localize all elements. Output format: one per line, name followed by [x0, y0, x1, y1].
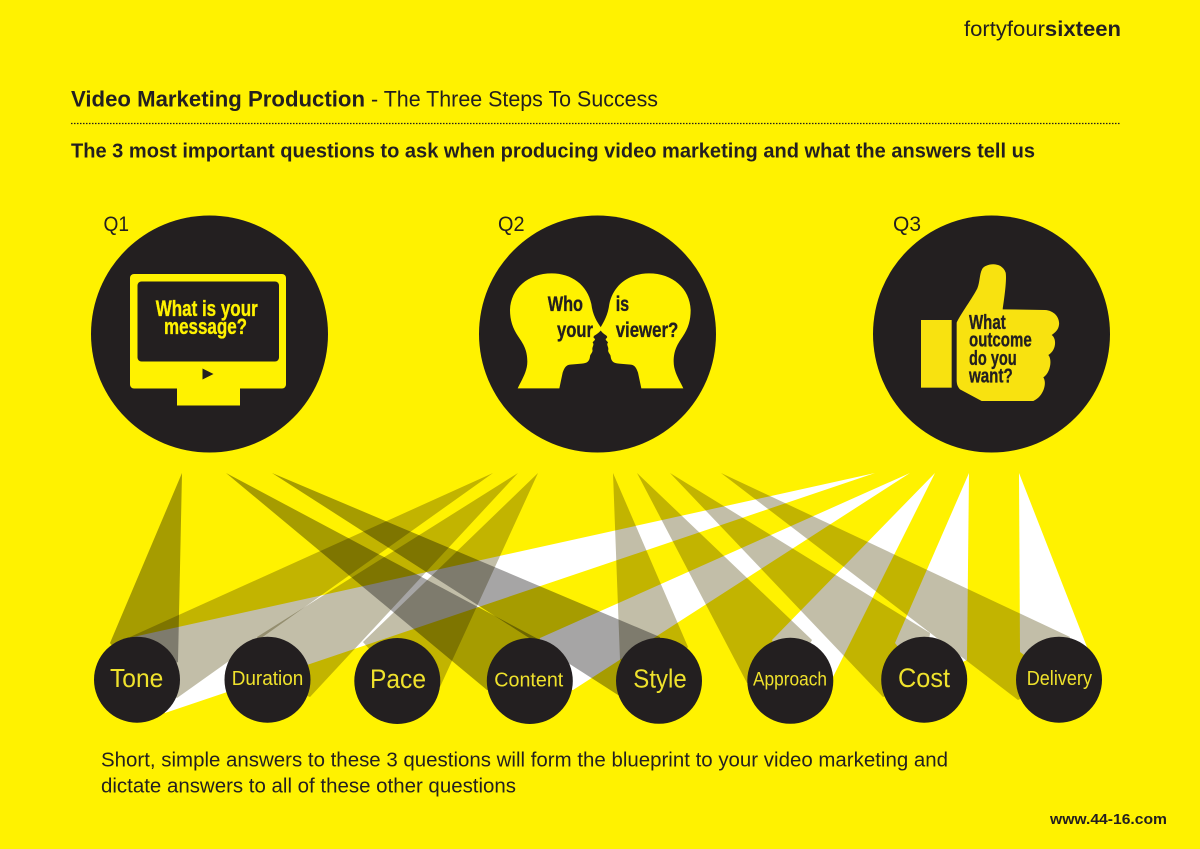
Q3 question text: want? [968, 366, 1013, 388]
website url: www.44-16.com [1049, 811, 1167, 828]
answer: Delivery: Delivery [1027, 667, 1093, 690]
Q2 question text: Who [548, 293, 583, 316]
closing text block: dictate answers to all of these other questions [101, 774, 516, 798]
brand logo: fortyfoursixteen [964, 18, 1121, 41]
Q2 circle [479, 216, 716, 452]
Q1 question text: message? [164, 314, 247, 339]
panel: Q1 message [91, 213, 328, 452]
subtitle: The 3 most important questions to ask when producing video marketing and what the answers tell us [71, 140, 1035, 162]
beams: answers linked to the three questions [110, 473, 1087, 713]
answer: Approach [747, 638, 833, 724]
answer: Delivery [1016, 637, 1102, 723]
Q3 label: Q3 [893, 213, 921, 236]
answer: Duration: Duration [232, 668, 303, 690]
answer: Approach: Approach [753, 669, 827, 691]
Q2 question text: your [557, 319, 593, 342]
panel: Q3 outcome [873, 213, 1110, 452]
answer: Pace: Pace [370, 664, 426, 694]
icon: two facing heads [510, 273, 691, 388]
answer: Cost [881, 637, 967, 723]
answer: Content [487, 638, 573, 724]
answer: Tone [94, 637, 180, 723]
dark beams from Q1 [110, 473, 660, 695]
Q3 question text [968, 312, 1032, 388]
Q2 question text: is [616, 293, 629, 316]
Q1 question text [156, 296, 258, 339]
Q1 label: Q1 [104, 213, 129, 236]
answer: Pace [354, 638, 440, 724]
answer: Duration [224, 637, 310, 723]
panel: Q2 viewer [479, 213, 716, 452]
answer: Content: Content [494, 670, 564, 692]
Q3 question text: do you [969, 348, 1017, 370]
title [71, 87, 658, 112]
Q2 question text: viewer? [616, 319, 678, 342]
medium beams from Q2 [130, 473, 1070, 700]
icon: thumbs up [921, 264, 1059, 401]
answer: Tone: Tone [110, 663, 163, 693]
Q2 question text [548, 293, 678, 342]
white beams from Q3 [133, 473, 1087, 713]
icon: monitor [130, 274, 286, 406]
title: Video Marketing Production [71, 87, 365, 112]
closing text block [101, 748, 948, 798]
answer: Cost: Cost [898, 663, 950, 693]
closing text block: Short, simple answers to these 3 questions will form the blueprint to your video marketing and [101, 748, 948, 772]
Q1 circle [91, 216, 328, 452]
answer circles row [94, 637, 1102, 724]
answer: Style: Style [633, 664, 687, 694]
Q3 question text: What [969, 312, 1006, 334]
Q1 question text: What is your [156, 296, 258, 321]
Q2 label: Q2 [498, 213, 524, 236]
answer: Style [616, 638, 702, 724]
Q3 circle [873, 216, 1110, 452]
Q3 question text: outcome [969, 330, 1032, 352]
title: - The Three Steps To Success [371, 87, 658, 112]
